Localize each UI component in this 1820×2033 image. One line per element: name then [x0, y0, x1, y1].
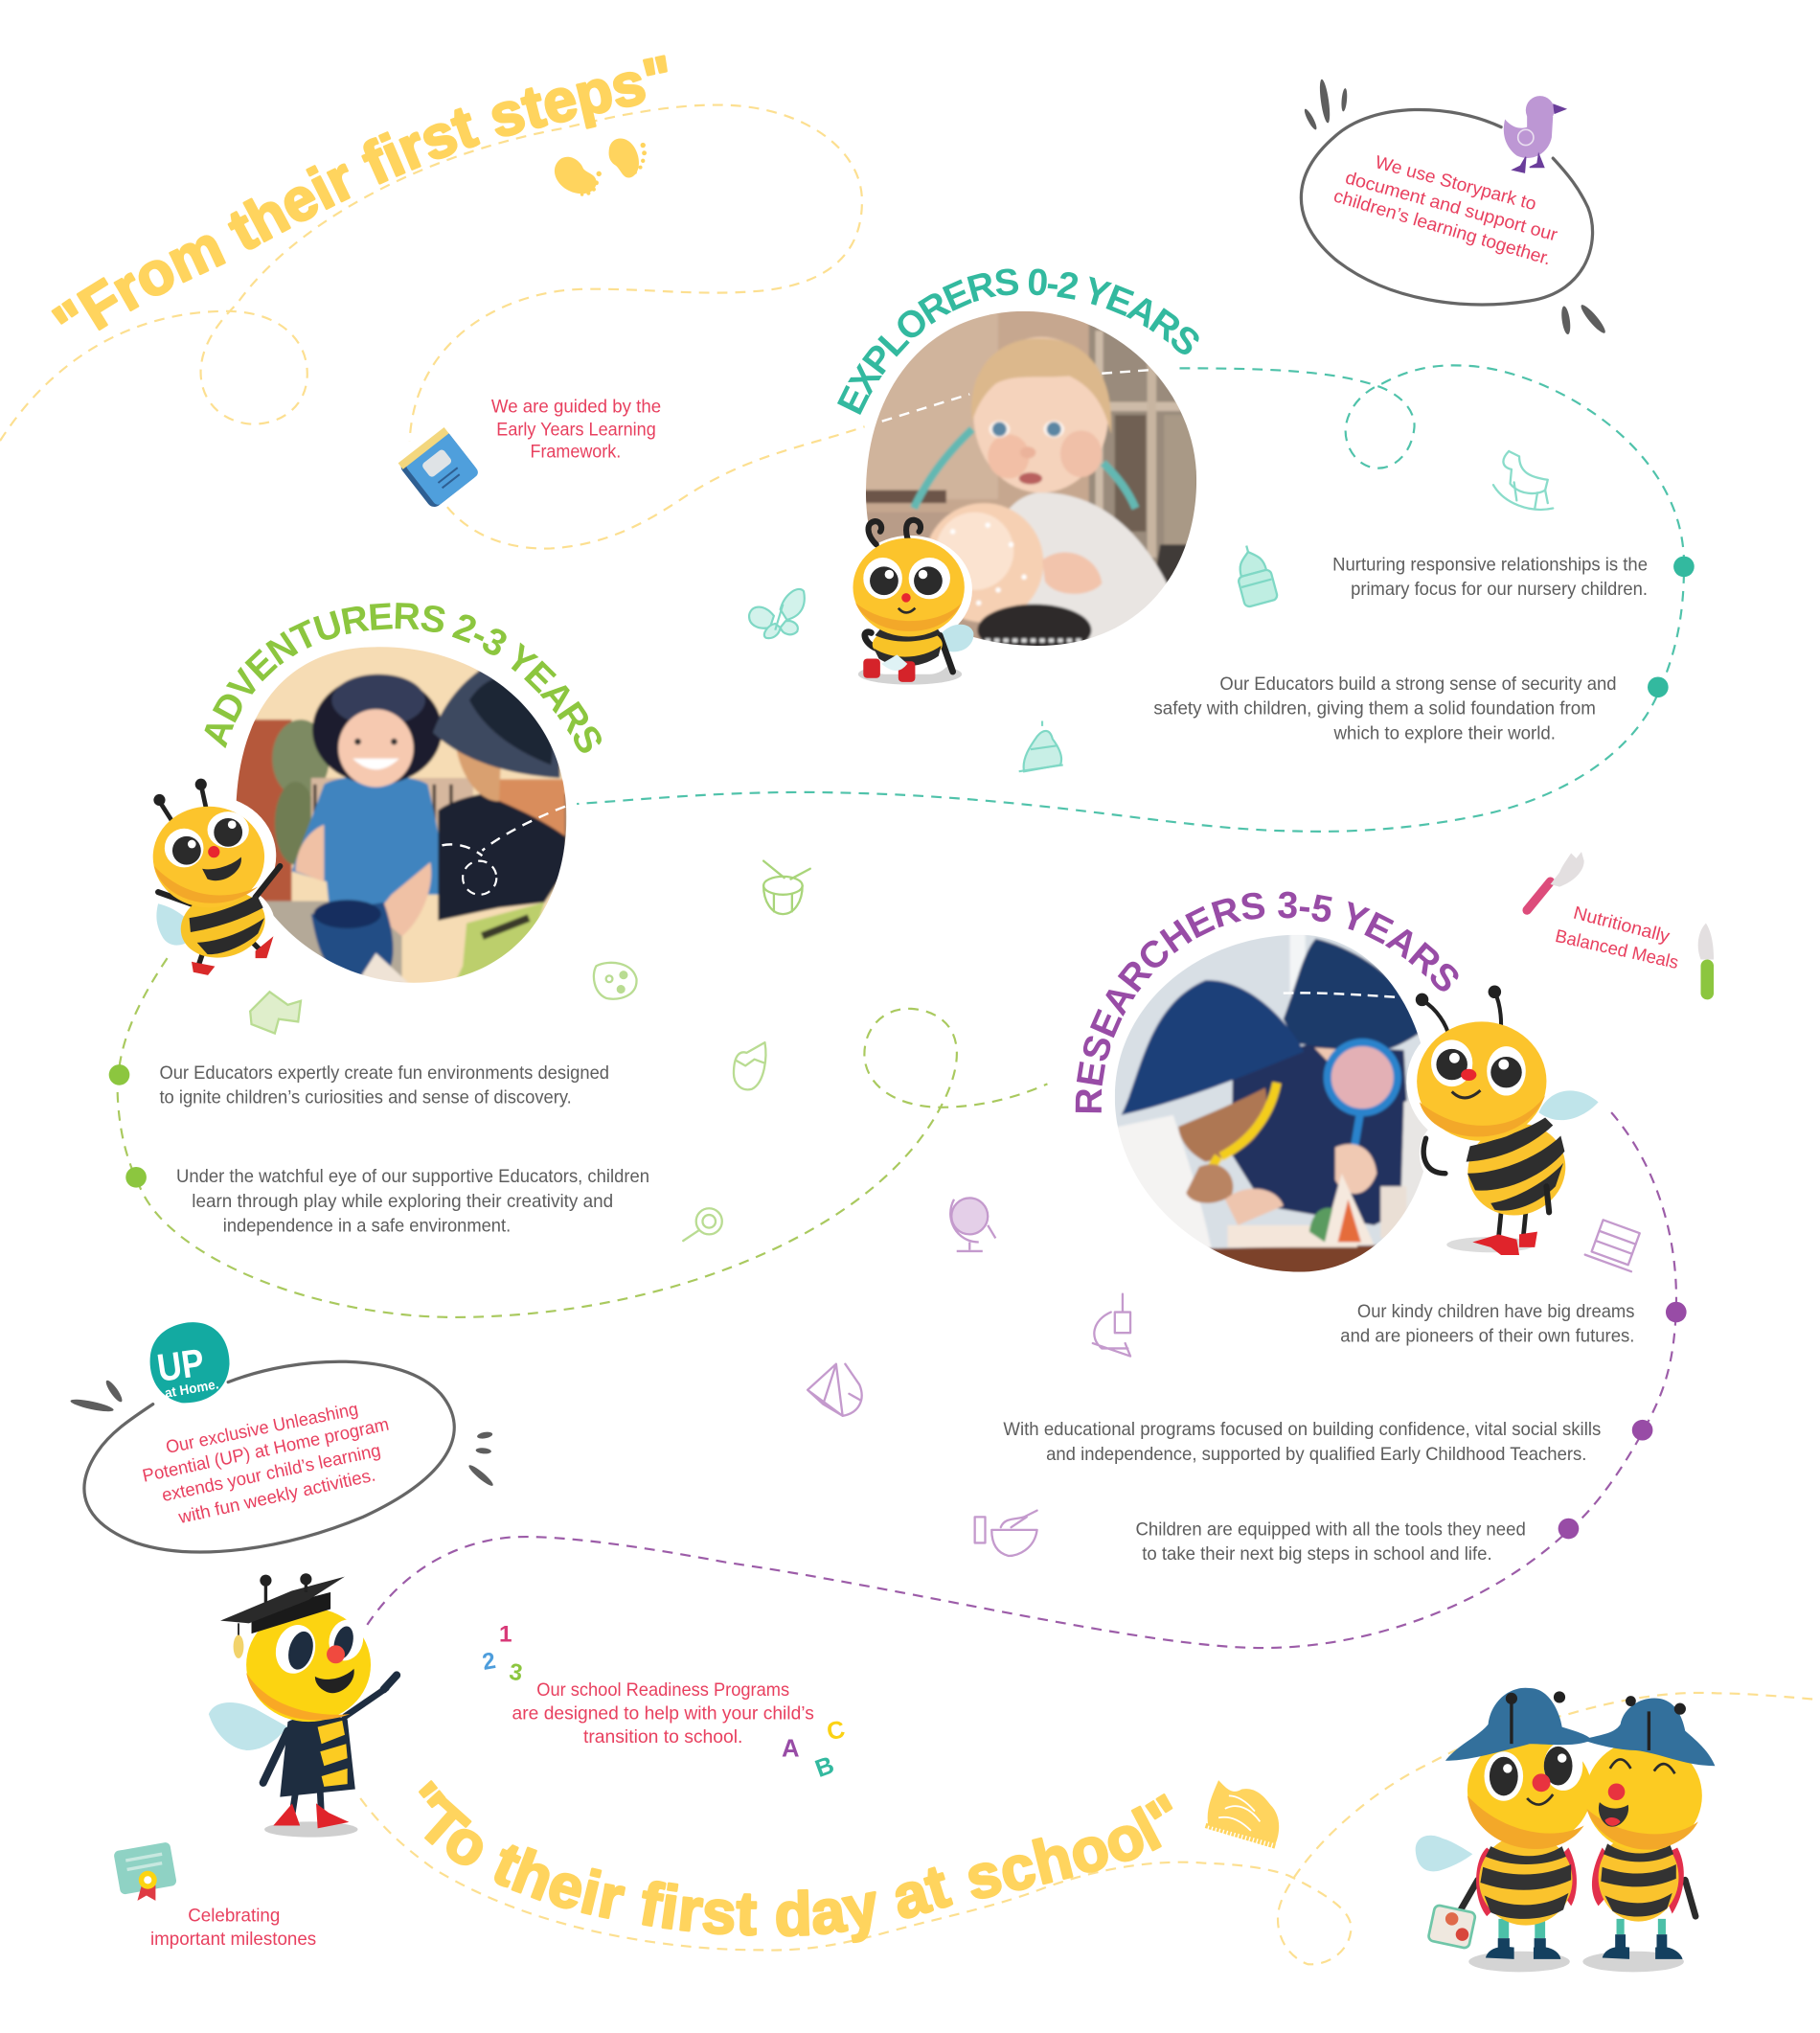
icon: letters abc: A	[782, 1736, 800, 1763]
icon: drum	[763, 861, 810, 914]
text: fun environments	[159, 1063, 609, 1108]
callout: up at home	[70, 1322, 495, 1552]
icon: numbers 123	[481, 1621, 524, 1686]
text: celebrating milestones	[150, 1907, 316, 1950]
icon: letters abc	[782, 1716, 848, 1783]
accent marks	[70, 1379, 495, 1488]
text: celebrating milestones: Celebrating	[188, 1907, 280, 1927]
journey path: yellow finish	[360, 1693, 1820, 1964]
dot marker 1	[109, 1064, 129, 1085]
icon: stacking rings	[1019, 720, 1063, 771]
text: next big steps: Children are equipped with all the tools they need	[1135, 1519, 1526, 1540]
panel: researchers 3-5 years	[807, 853, 1715, 1565]
bee: graduate	[209, 1573, 397, 1838]
text: school readiness	[512, 1680, 814, 1747]
icon: up at home logo: at Home.	[164, 1377, 220, 1402]
text: security and safety: Our Educators build a strong sense of security and	[1219, 674, 1617, 695]
callout text: document and support our	[1343, 168, 1559, 245]
icon: letters abc: B	[811, 1751, 838, 1783]
bee: baby sitting	[848, 520, 973, 685]
callout text: Our exclusive Unleashing	[164, 1400, 360, 1458]
text: school readiness: transition to school.	[583, 1727, 742, 1747]
photo: children with magnifiers	[1108, 927, 1439, 1277]
icon: kite	[808, 1364, 862, 1416]
path through photo	[442, 807, 565, 895]
accent marks	[1303, 79, 1608, 335]
icon: puzzle	[250, 992, 301, 1034]
text: educational programs: With educational programs focused on building confidence, vital social skills	[1003, 1420, 1601, 1440]
photo: baby with lamp	[866, 311, 1196, 646]
text: watchful eye	[176, 1167, 649, 1237]
text: watchful eye: Under the watchful eye of our supportive Educators, children	[176, 1167, 649, 1187]
text: big dreams: Our kindy children have big dreams	[1357, 1302, 1634, 1322]
text: educational programs: and independence, supported by qualified Early Childhood Teachers.	[1046, 1445, 1586, 1465]
icon: globe	[950, 1198, 995, 1251]
text: guided by framework: Early Years Learning	[496, 421, 656, 441]
callout outline	[84, 1361, 454, 1552]
text: big dreams: and are pioneers of their own futures.	[1340, 1327, 1634, 1347]
icon: butterfly	[749, 589, 805, 638]
bee: standing with head tilt	[1406, 986, 1599, 1255]
icon: flask and bowl	[975, 1511, 1037, 1556]
dot marker 1	[1666, 1302, 1687, 1322]
text: watchful eye: independence in a safe environment.	[223, 1217, 511, 1237]
icon: microscope	[1093, 1294, 1130, 1357]
callout outline	[1301, 109, 1593, 305]
journey path: teal explorers	[577, 365, 1684, 832]
panel: school readiness	[113, 1573, 848, 1950]
heading: adventurers: ADVENTURERS 2-3 YEARS	[205, 603, 602, 753]
panel: adventurers 2-3 years	[109, 603, 811, 1242]
path through photo	[1284, 993, 1416, 998]
text: guided by framework	[491, 397, 661, 463]
photo: child with educator	[227, 642, 577, 992]
icon: hatching egg	[734, 1042, 765, 1089]
icon: baby bottle	[1230, 541, 1278, 607]
icon: palette	[594, 963, 637, 999]
text: school readiness: Our school Readiness Programs	[536, 1680, 789, 1701]
heading: researchers: RESEARCHERS 3-5 YEARS	[1075, 891, 1458, 1113]
text: guided by framework: We are guided by the	[491, 397, 661, 417]
text: guided by framework: Framework.	[530, 443, 621, 463]
text: nutritionally balanced meals: Nutritionally	[1571, 903, 1672, 948]
icon: footprints	[555, 138, 647, 196]
text: fun environments: to ignite children’s curiosities and sense of discovery.	[159, 1088, 572, 1108]
panel: explorers 0-2 years	[748, 268, 1695, 772]
text: responsive relationships: Nurturing responsive relationships is the	[1332, 555, 1648, 575]
icon: rocking horse	[1493, 451, 1553, 510]
icon: purple duck	[1504, 96, 1567, 172]
text: security and safety	[1153, 674, 1617, 743]
callout text	[1331, 152, 1559, 269]
icon: certificate	[113, 1841, 177, 1901]
callout text: Potential (UP) at Home program	[141, 1415, 391, 1487]
text: fun environments: Our Educators expertly create fun environments designed	[159, 1063, 609, 1084]
bees: two friends with hats	[1416, 1688, 1715, 1972]
dot marker 2	[1648, 676, 1669, 697]
right bee	[1582, 1696, 1715, 1959]
journey path: purple researchers	[366, 1112, 1676, 1648]
journey path: green adventurers	[118, 958, 1047, 1317]
callout text: with fun weekly activities.	[176, 1465, 377, 1528]
callout text: extends your child’s learning	[160, 1441, 382, 1506]
bee: waving	[147, 779, 280, 973]
text: watchful eye: learn through play while exploring their creativity and	[192, 1192, 613, 1212]
text: security and safety: safety with children, giving them a solid foundation from	[1153, 699, 1596, 720]
callout text: children’s learning together.	[1331, 186, 1553, 269]
icon: blue book	[398, 427, 480, 510]
heading: explorers: EXPLORERS 0-2 YEARS	[837, 268, 1199, 415]
text: school readiness: are designed to help with your child’s	[512, 1703, 814, 1724]
callout text: We use Storypark to	[1373, 152, 1538, 215]
icon: letters abc: C	[825, 1716, 848, 1746]
path through photo	[865, 368, 1174, 426]
icon: numbers 123: 3	[508, 1659, 524, 1686]
dot marker 3	[1558, 1519, 1579, 1539]
dot marker 1	[1673, 557, 1695, 577]
icon: up at home logo: UP	[154, 1340, 207, 1390]
icon: up at home logo	[150, 1322, 230, 1403]
dot marker 2	[125, 1167, 147, 1188]
text: educational programs	[1003, 1420, 1601, 1465]
text: responsive relationships: primary focus for our nursery children.	[1351, 580, 1648, 600]
icon: knife	[1698, 924, 1714, 999]
journey path: yellow start	[0, 105, 865, 549]
closing title: to their first day at school: "To their first day at school"	[419, 1780, 1172, 1943]
dot marker 2	[1632, 1420, 1652, 1441]
text: security and safety: which to explore their world.	[1333, 723, 1556, 743]
icon: fork	[1527, 852, 1584, 910]
left bee	[1416, 1688, 1592, 1959]
text: big dreams	[1340, 1302, 1634, 1347]
shadows	[1468, 1952, 1684, 1972]
text: nutritionally balanced meals	[1553, 903, 1680, 973]
title: from their first steps: "From their first steps"	[52, 55, 668, 331]
text: next big steps: to take their next big steps in school and life.	[1142, 1544, 1492, 1565]
icon: numbers 123: 1	[499, 1621, 512, 1647]
icon: numbers 123: 2	[481, 1648, 498, 1676]
text: next big steps	[1135, 1519, 1526, 1565]
callout text	[141, 1400, 391, 1528]
icon: magnifying glass	[683, 1208, 722, 1241]
text: celebrating milestones: important milestones	[150, 1930, 316, 1950]
text: nutritionally balanced meals: Balanced Meals	[1553, 926, 1680, 973]
text: responsive relationships	[1332, 555, 1648, 600]
icon: yellow shoes	[1206, 1780, 1279, 1846]
icon: abacus	[1585, 1218, 1645, 1271]
callout: storypark	[1301, 79, 1608, 335]
